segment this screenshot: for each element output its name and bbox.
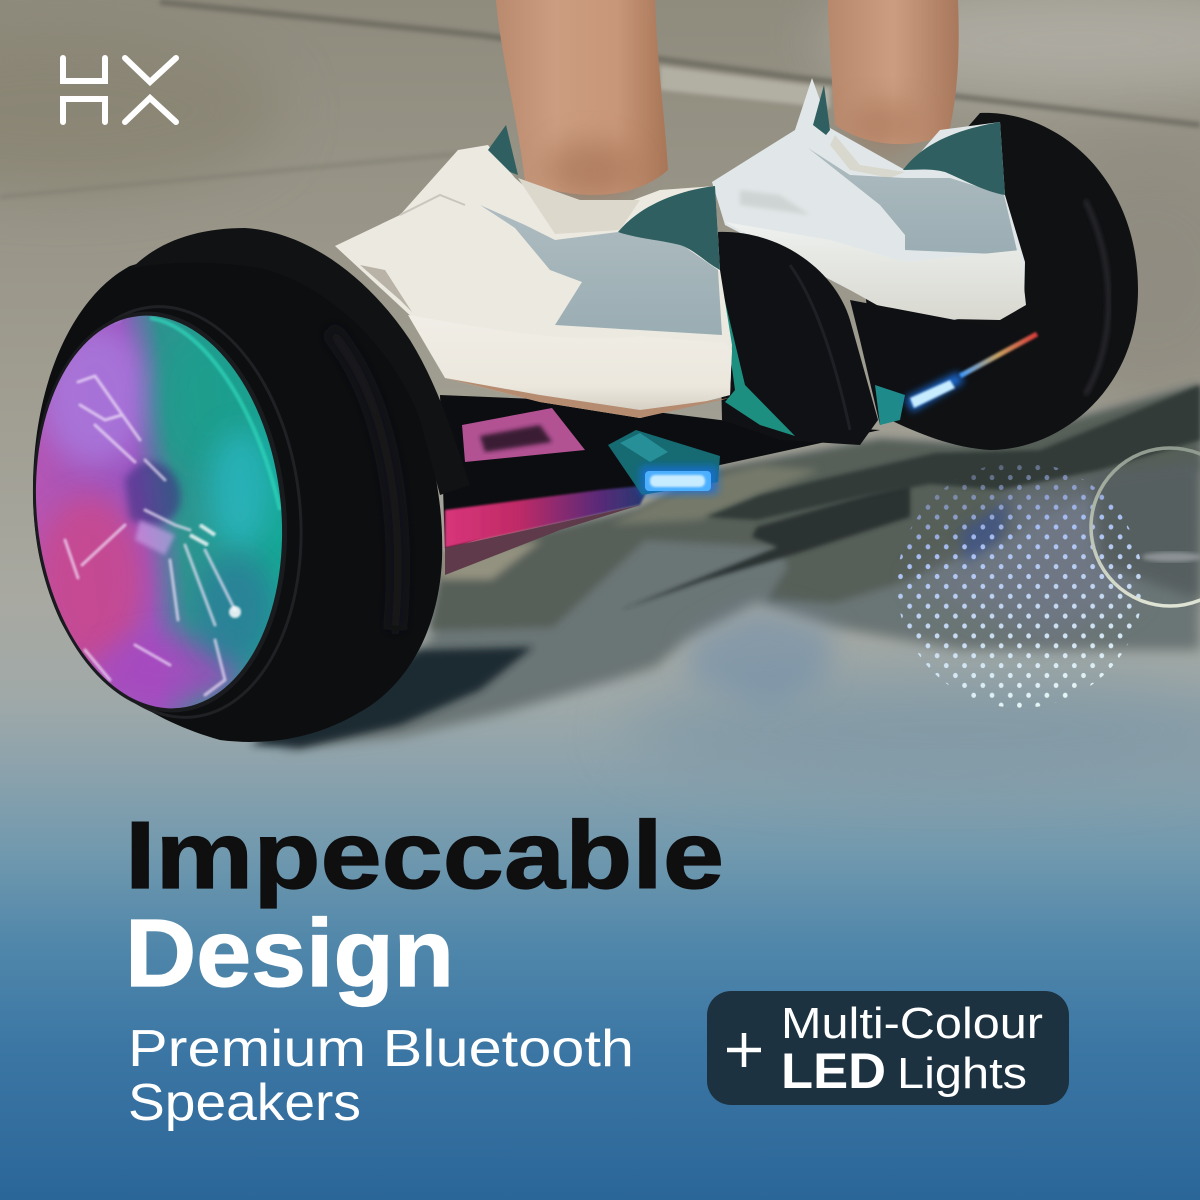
subtitle: Premium Bluetooth	[128, 1020, 634, 1078]
rear wheel	[860, 113, 1138, 450]
front wheel tyre	[33, 256, 442, 742]
rear LED light and rainbow streak	[905, 334, 1037, 412]
shadow under hoverboard	[250, 385, 1200, 750]
centre fender and board body	[440, 232, 1034, 550]
right shoe	[712, 78, 1026, 325]
thin glowing ring	[1091, 448, 1200, 606]
title: Design	[125, 900, 454, 1007]
front fender	[132, 228, 470, 495]
legs	[496, 0, 959, 200]
title: Impeccable	[125, 802, 724, 909]
subtitle: Speakers	[128, 1074, 361, 1132]
front wheel rim lit magenta and teal	[32, 305, 302, 719]
subtitle	[128, 1020, 634, 1132]
left shoe	[335, 125, 732, 418]
callout: multi-colour LED lights: Multi-Colour	[781, 999, 1043, 1048]
callout: multi-colour LED lights	[707, 991, 1069, 1105]
colour-lit chrome bar	[445, 408, 650, 575]
halftone dot circle	[898, 465, 1141, 708]
callout: multi-colour LED lights: Lights	[897, 1049, 1027, 1098]
title	[125, 802, 724, 1007]
blue LED light on front of board	[608, 430, 720, 495]
callout: multi-colour LED lights: LED	[781, 1043, 886, 1099]
brand logo	[63, 58, 176, 122]
